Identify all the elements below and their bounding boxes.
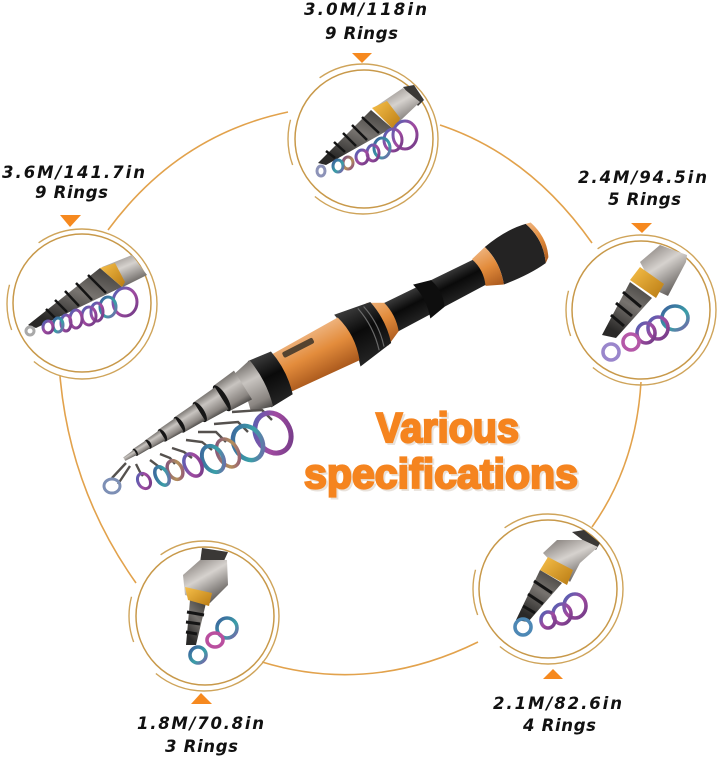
rings circle: [473, 514, 623, 664]
rings circle: [129, 541, 279, 691]
arrow: down: [631, 223, 652, 233]
label: 2.4M: 5 Rings: [608, 190, 681, 209]
orange reel seat: [271, 316, 363, 394]
arrow: down: [60, 215, 81, 227]
label: 3.0M: [304, 0, 427, 43]
mini rod: [515, 530, 600, 635]
arrow: up: [191, 693, 212, 704]
rings circle: [566, 235, 716, 385]
connector ring: [60, 112, 641, 675]
upper black shaft: [379, 256, 491, 334]
label: 1.8M: 1.8M/70.8in: [137, 714, 264, 733]
silver collar: [230, 359, 276, 416]
label: 3.6M: 9 Rings: [35, 183, 108, 202]
black lower collar: [248, 348, 296, 407]
black ferrule: [413, 275, 449, 319]
black reel seat collar: [334, 296, 397, 366]
title: Various specifications: specifications: [306, 452, 580, 499]
label: 2.1M: [493, 694, 622, 735]
guide rings: [104, 406, 298, 493]
panel: 3.0M rod: [288, 0, 438, 214]
reel seat slot: [282, 337, 315, 358]
grip: [483, 220, 550, 286]
rings circle: [288, 64, 438, 214]
label: 2.4M: [578, 168, 707, 209]
rings circle: [7, 229, 157, 379]
panel: 1.8M rod: [129, 541, 279, 756]
label: 3.6M: 3.6M/141.7in: [2, 163, 145, 182]
guide frames: [112, 410, 272, 484]
orange ring: [366, 295, 405, 346]
title: Various specifications: Various: [378, 406, 521, 453]
label: 1.8M: 3 Rings: [165, 737, 238, 756]
telescopic sections: [115, 371, 252, 474]
title: Various specifications: specifications: [304, 450, 578, 497]
label: 3.0M: 9 Rings: [325, 24, 398, 43]
main telescopic fishing rod: [104, 214, 557, 493]
rod handle and reel seat: [229, 214, 557, 420]
grip end cap: [526, 220, 554, 263]
panel: 2.1M rod: [473, 514, 623, 735]
label: 3.6M: [2, 163, 145, 202]
panel: 3.6M rod: [2, 163, 157, 379]
label: 2.4M: 2.4M/94.5in: [578, 168, 707, 187]
mini rod: [317, 85, 424, 176]
label: 2.1M: 2.1M/82.6in: [493, 694, 622, 713]
mini rod: [602, 245, 688, 360]
arrow: down: [352, 53, 372, 63]
orange collar: [470, 245, 507, 292]
mini rod: [26, 255, 147, 335]
arrow: up: [543, 669, 563, 679]
title: Various specifications: [304, 404, 580, 499]
label: 3.0M: 3.0M/118in: [304, 0, 427, 19]
label: 2.1M: 4 Rings: [522, 716, 596, 735]
panel: 2.4M rod: [566, 168, 716, 385]
title: Various specifications: Various: [376, 404, 519, 451]
label: 1.8M: [137, 714, 264, 756]
mini rod: [183, 548, 237, 663]
